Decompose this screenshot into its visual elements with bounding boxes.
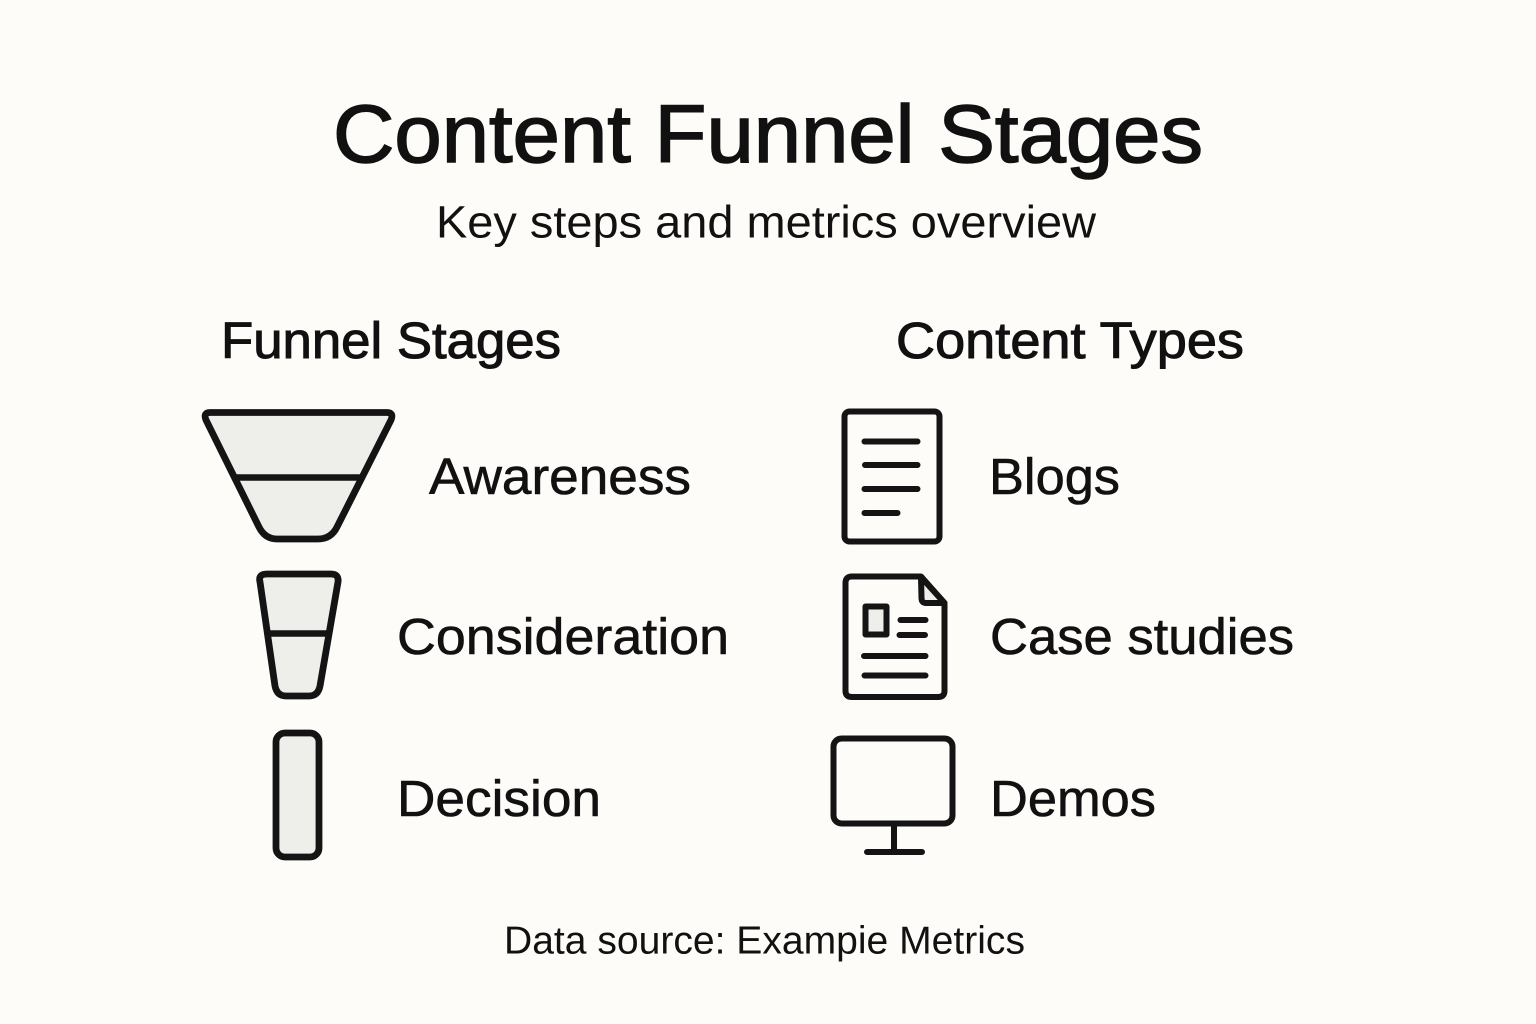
heading: funnel stages: Funnel Stages <box>221 312 561 369</box>
label: awareness: Awareness <box>429 448 691 505</box>
heading: content types: Content Types <box>896 312 1244 369</box>
label: blogs: Blogs <box>989 448 1120 505</box>
icon: blog document <box>844 412 940 542</box>
label: case studies: Case studies <box>990 608 1294 665</box>
label: demos: Demos <box>990 770 1156 827</box>
subtitle: Key steps and metrics overview <box>436 196 1097 248</box>
icon: consideration funnel <box>260 574 338 696</box>
label: consideration: Consideration <box>397 608 729 665</box>
title: Content Funnel Stages <box>333 89 1203 180</box>
icon: case study document <box>846 576 944 697</box>
icon: awareness funnel <box>205 412 392 539</box>
icon: demo monitor <box>834 738 952 852</box>
footer: data source: Data source: Exampie Metrics <box>504 920 1025 962</box>
label: decision: Decision <box>397 770 601 827</box>
icon: decision bar <box>276 733 319 857</box>
